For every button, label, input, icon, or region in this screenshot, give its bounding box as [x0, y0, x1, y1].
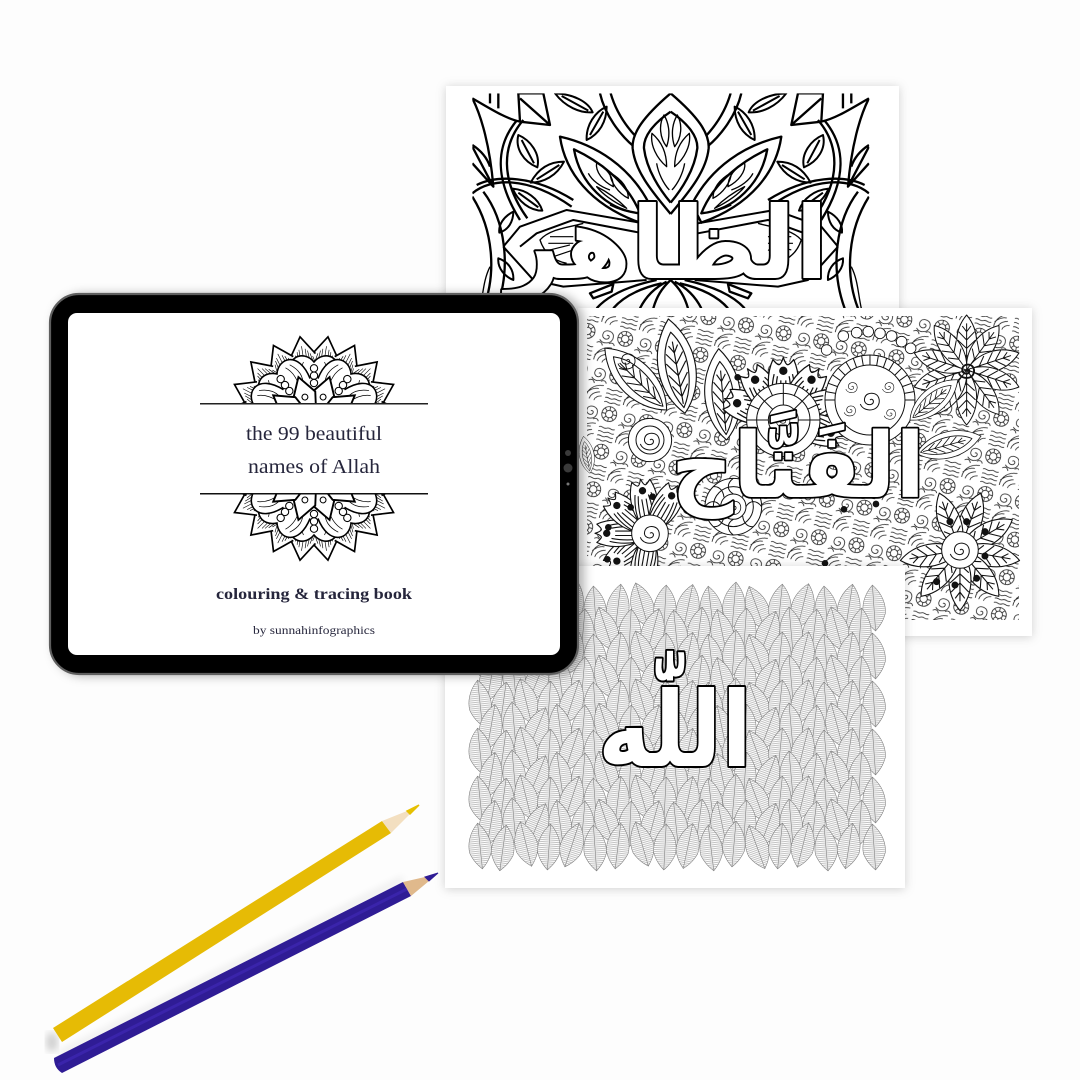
tablet screen: [68, 313, 560, 655]
page sheet: [445, 566, 905, 888]
icon: yellow pencil: [46, 805, 419, 1052]
camera dots: [564, 450, 572, 486]
panel: colouring page Allah with leaves: [445, 566, 905, 888]
divider line: bottom: [200, 493, 428, 494]
tablet body: [50, 294, 578, 674]
cover subtitle: colouring & tracing book: [216, 586, 412, 603]
page sheet: [446, 86, 899, 386]
cover title line 2: names of Allah: [248, 456, 380, 478]
floral doodle artwork: [576, 315, 1022, 620]
divider line: top: [200, 403, 428, 404]
cover title line 1: the 99 beautiful: [246, 423, 382, 445]
icon: blue pencil: [54, 873, 438, 1073]
cover author: by sunnahinfographics: [253, 623, 375, 637]
panel: colouring page Az-Zahir with mandala: [442, 82, 904, 308]
leaf pattern artwork: [466, 580, 887, 872]
big flowers and leaves: [576, 315, 1022, 610]
mandala artwork: [472, 93, 869, 308]
doodle texture: [587, 316, 1019, 620]
pencil shadow: [46, 1032, 58, 1052]
Arabic name: Az-Zahir: الظاهر: [501, 185, 828, 303]
mandala: bottom half: [233, 494, 395, 562]
panel: colouring page Al-Fattah with floral doodles: [576, 308, 1032, 636]
page sheet: [578, 308, 1032, 636]
pencil body: [53, 821, 391, 1042]
panel: tablet showing the book cover: [50, 294, 578, 674]
Arabic name: Allah: اللّٰه: [598, 651, 752, 791]
Arabic name: Al-Fattah: الفَتَّاح: [671, 410, 925, 519]
pencil body: [54, 882, 411, 1073]
mandala: top half: [233, 335, 395, 403]
pencil shadow: [60, 879, 403, 1054]
